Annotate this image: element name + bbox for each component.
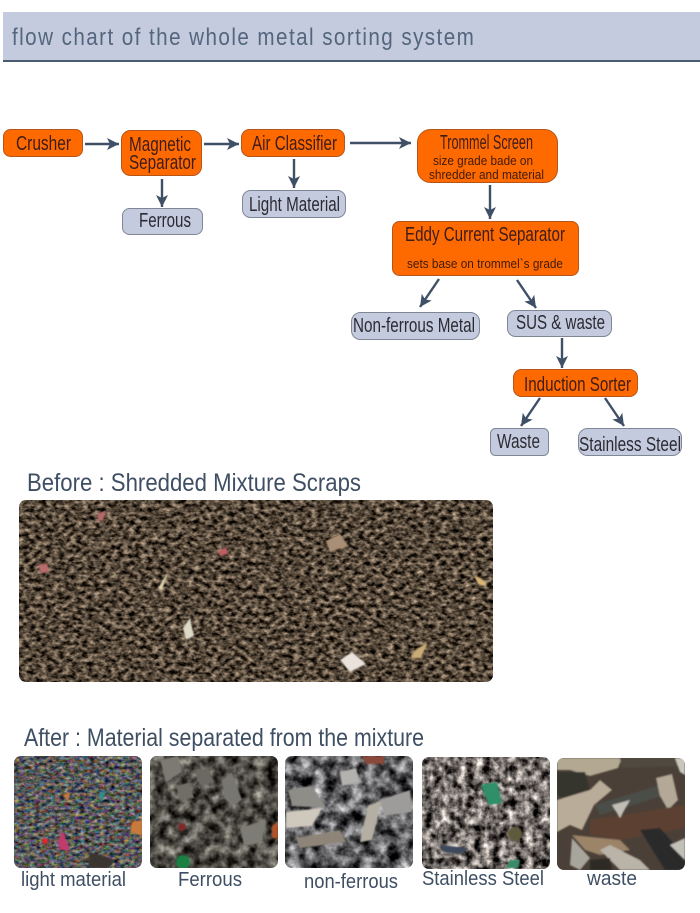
arrow: crusher to magnetic separator [85,143,119,145]
node: Trommel Screen [418,130,558,182]
caption: waste: waste [586,868,637,890]
photo: stainless steel [422,757,550,869]
photo: waste [557,758,685,870]
node: Ferrous [122,208,202,234]
arrow: air classifier to light material [293,159,295,188]
title: flow chart of the whole metal sorting system [12,24,474,50]
title banner [3,12,700,62]
photo: ferrous [150,756,278,869]
node: Crusher [4,130,82,156]
caption: light material: light material [21,869,126,891]
node: Trommel Screen: Trommel Screen [440,132,533,154]
node: Magnetic Separator: Magnetic [129,134,191,156]
node: Induction Sorter [514,370,638,396]
arrow: induction sorter to stainless steel [605,398,624,426]
node: Crusher: Crusher [16,133,71,155]
node: Eddy Current Separator: Eddy Current Separator [405,224,565,246]
node: Waste: Waste [497,431,540,453]
node: Eddy Current Separator: sets base on trommel`s grade [407,257,563,271]
caption: stainless steel: Stainless Steel [422,868,544,890]
arrow: magnetic separator to air classifier [204,143,239,145]
node: SUS & waste [508,310,612,336]
node: Magnetic Separator: Separator [129,152,196,174]
photo: shredded mixture scraps [19,500,493,682]
arrow: eddy current to SUS and waste [517,280,536,308]
arrow: air classifier to trommel screen [350,142,411,144]
flow chart [4,130,682,456]
heading: before: Before : Shredded Mixture Scraps [27,469,361,497]
node: Trommel Screen: size grade bade on [433,154,533,168]
photo: light material [14,756,143,868]
caption: ferrous: Ferrous [178,869,242,891]
node: Light Material: Light Material [249,194,340,216]
node: Trommel Screen: shredder and material [429,168,544,182]
node: Non-ferrous Metal [352,312,480,340]
node: Air Classifier: Air Classifier [252,133,337,155]
node: Light Material [242,190,346,218]
node: Non-ferrous Metal: Non-ferrous Metal [353,315,475,337]
node: Ferrous: Ferrous [139,210,191,232]
node: Eddy Current Separator [392,222,578,276]
node: Induction Sorter: Induction Sorter [524,374,631,396]
node: Waste [490,428,548,456]
arrow: eddy current to non-ferrous metal [420,279,439,307]
node: Air Classifier [242,130,344,156]
photo: non-ferrous [285,756,413,868]
arrow: magnetic separator to ferrous [161,179,163,207]
caption: non-ferrous: non-ferrous [304,871,398,893]
heading: after: After : Material separated from the mixture [24,724,424,752]
node: SUS & waste: SUS & waste [516,312,605,334]
node: Magnetic Separator [122,130,202,176]
node: Stainless Steel [578,428,682,456]
arrow: SUS and waste to induction sorter [561,338,563,368]
arrow: induction sorter to waste [521,398,540,426]
arrow: trommel screen to eddy current separator [489,185,491,219]
